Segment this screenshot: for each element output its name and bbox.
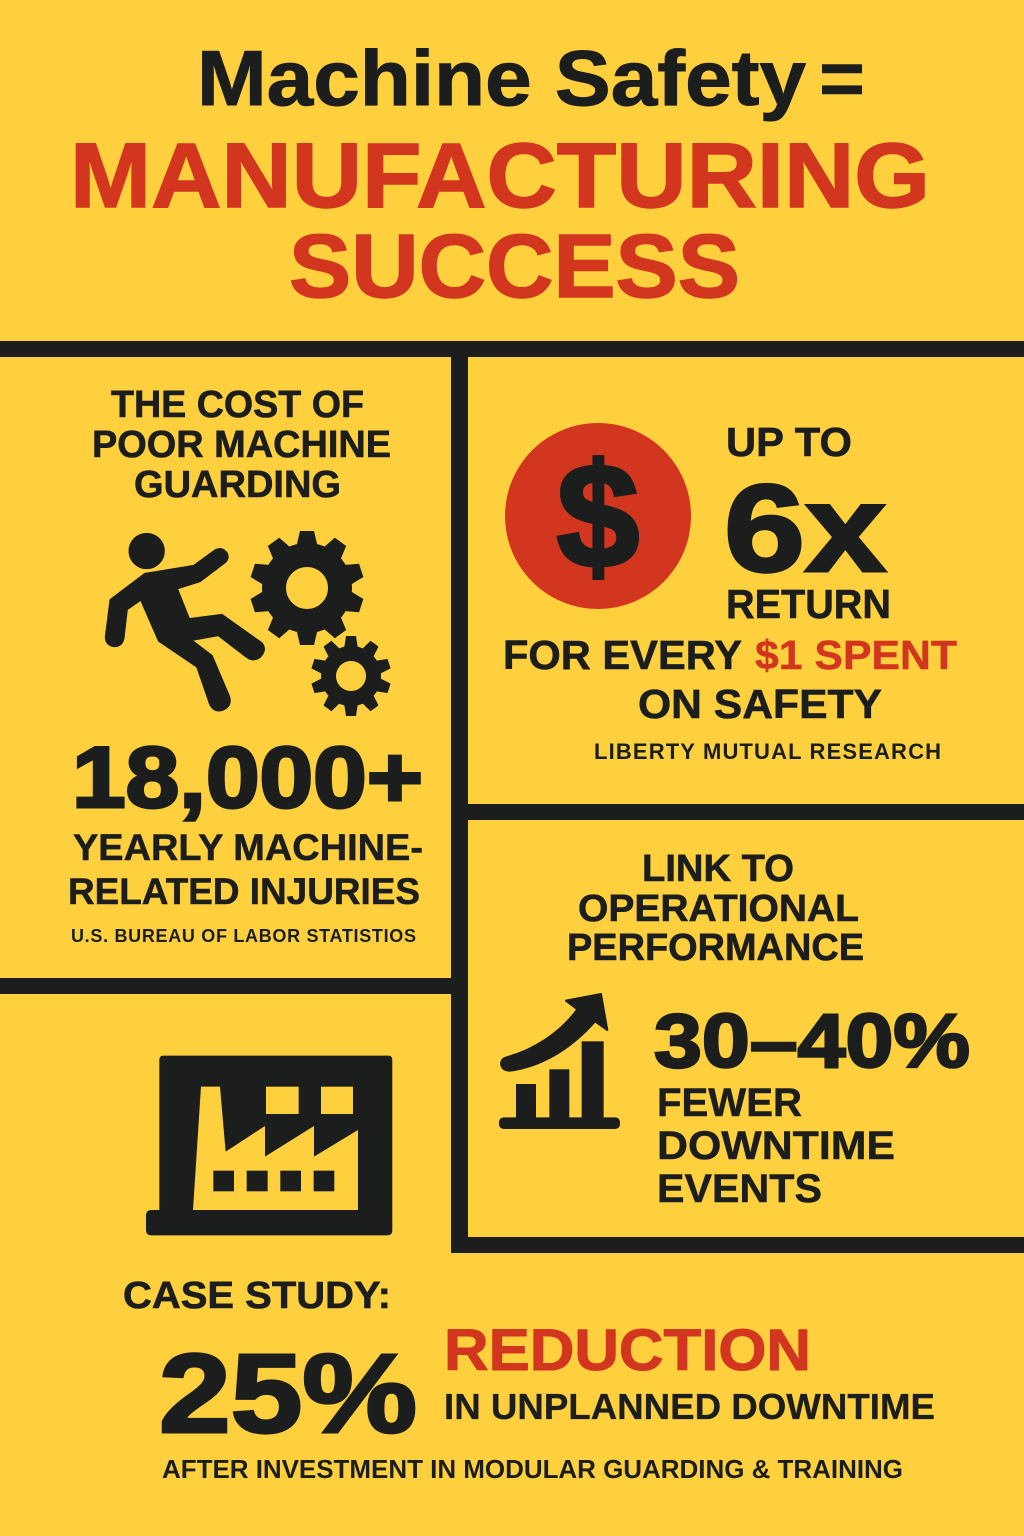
text: fewer downtime events bbox=[657, 1081, 895, 1211]
text: in unplanned downtime: IN UNPLANNED DOWNTIME bbox=[444, 1386, 935, 1427]
text: for every $1 spent: FOR EVERY bbox=[503, 632, 742, 678]
title bbox=[70, 34, 930, 317]
heading: case study: CASE STUDY: bbox=[123, 1275, 391, 1317]
source: liberty mutual research: LIBERTY MUTUAL RESEARCH bbox=[594, 739, 941, 764]
text: fewer downtime events: DOWNTIME bbox=[657, 1124, 895, 1168]
text: yearly machine-related injuries: YEARLY MACHINE- bbox=[73, 827, 423, 868]
heading: cost of poor machine guarding: GUARDING bbox=[134, 464, 341, 506]
heading: link to operational performance bbox=[567, 848, 864, 969]
heading: link to operational performance: OPERATIONAL bbox=[578, 888, 859, 930]
panel: link to operational performance bbox=[499, 848, 970, 1211]
stat: 25%: 25% bbox=[159, 1331, 417, 1456]
title: = bbox=[819, 34, 865, 122]
stat: 18,000+ injuries: 18,000+ bbox=[72, 730, 423, 826]
text: after investment: AFTER INVESTMENT IN MODULAR GUARDING & TRAINING bbox=[162, 1454, 903, 1484]
heading: cost of poor machine guarding: THE COST OF bbox=[111, 384, 364, 426]
icon: factory bbox=[146, 1056, 392, 1235]
icon: rising bar chart with arrow bbox=[499, 994, 620, 1129]
text: for every $1 spent: $1 SPENT bbox=[755, 632, 957, 678]
text: fewer downtime events: FEWER bbox=[657, 1081, 802, 1125]
text: on safety: ON SAFETY bbox=[638, 681, 882, 727]
icon: person falling into gears bbox=[106, 531, 391, 716]
text: reduction: REDUCTION bbox=[444, 1318, 811, 1383]
text: for every $1 spent bbox=[503, 632, 957, 678]
title: SUCCESS bbox=[289, 217, 740, 317]
heading: link to operational performance: LINK TO bbox=[642, 848, 794, 890]
heading: cost of poor machine guarding bbox=[92, 384, 391, 506]
panel: case study bbox=[123, 1056, 935, 1484]
heading: link to operational performance: PERFORMANCE bbox=[567, 927, 864, 969]
text: yearly machine-related injuries bbox=[68, 827, 423, 912]
heading: cost of poor machine guarding: POOR MACHINE bbox=[92, 424, 391, 466]
source: bureau of labor statistics: U.S. BUREAU OF LABOR STATISTIOS bbox=[71, 926, 416, 946]
panel: return on safety bbox=[503, 419, 957, 764]
text: fewer downtime events: EVENTS bbox=[657, 1167, 822, 1211]
icon: dollar coin: $ bbox=[557, 434, 639, 599]
stat: 6x: 6x bbox=[724, 460, 886, 598]
title: Machine Safety bbox=[197, 34, 806, 122]
panel: cost of poor machine guarding bbox=[68, 384, 423, 946]
text: up to: UP TO bbox=[726, 419, 852, 465]
stat: 30-40%: 30–40% bbox=[654, 999, 970, 1084]
icon: dollar coin bbox=[505, 423, 691, 609]
title: MANUFACTURING bbox=[70, 125, 930, 227]
text: yearly machine-related injuries: RELATED INJURIES bbox=[68, 871, 420, 912]
text: return: RETURN bbox=[726, 581, 891, 627]
